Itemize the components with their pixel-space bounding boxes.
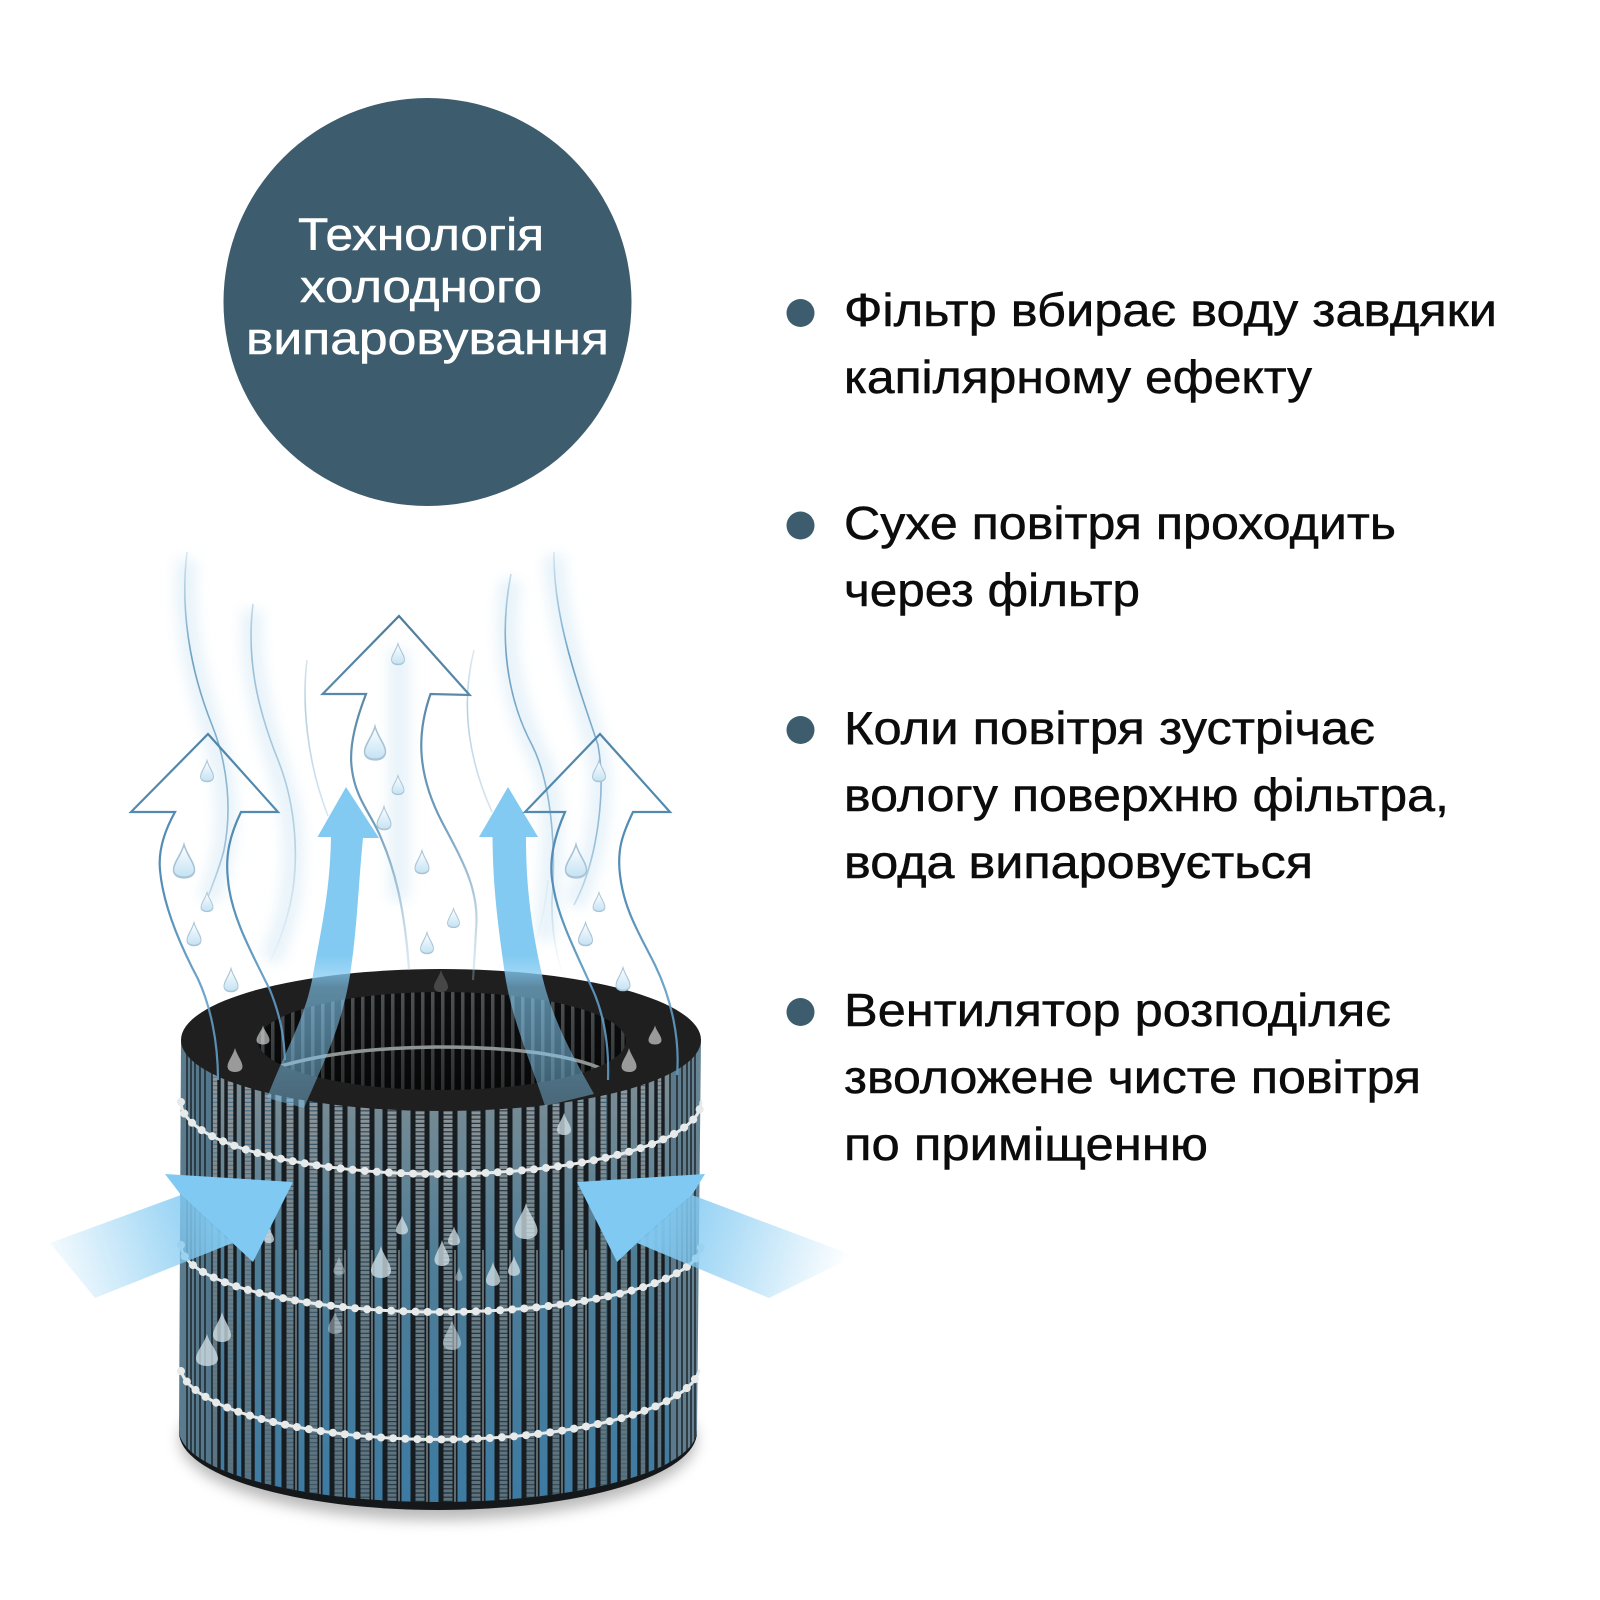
base edge — [179, 1420, 697, 1510]
bullet 1: капілярному ефекту — [844, 351, 1312, 403]
title circle: холодного — [300, 261, 542, 312]
bullet 4: зволожене чисте повітря — [844, 1051, 1421, 1103]
white bead rings — [181, 1102, 701, 1439]
ring bottom — [181, 1371, 699, 1439]
outline arrow: right — [525, 734, 678, 1080]
bullet 1: Фільтр вбирає воду завдяки — [844, 284, 1497, 336]
foam top rim — [181, 969, 701, 1111]
inner hole with pleats — [258, 992, 626, 1090]
bullet 3 — [786, 702, 1449, 888]
bullet 3: вологу поверхню фільтра, — [844, 769, 1449, 821]
grey pleats — [216, 1040, 659, 1508]
bullet list — [786, 284, 1497, 1170]
bullet 2 — [786, 497, 1396, 616]
ring top — [181, 1102, 701, 1174]
bullet 4 — [786, 984, 1421, 1170]
up arrow: right solid — [479, 787, 594, 1106]
outline arrow: centre — [323, 616, 477, 980]
bullet 4: по приміщенню — [844, 1118, 1208, 1170]
title circle: Технологія — [298, 209, 544, 260]
pleated body — [170, 1030, 710, 1520]
illustration: thin wavy vapour lines — [185, 552, 601, 1000]
filter cylinder — [170, 969, 710, 1520]
bullet 3: Коли повітря зустрічає — [844, 702, 1375, 754]
ground shadow — [180, 1360, 696, 1520]
bullet 3: вода випаровується — [844, 836, 1313, 888]
up arrow: left solid — [267, 787, 379, 1108]
bullet 2: через фільтр — [844, 564, 1140, 616]
bullet 2: Сухе повітря проходить — [844, 497, 1396, 549]
title circle: випаровування — [246, 313, 609, 364]
dark grooves — [187, 1040, 695, 1508]
droplets on filter — [196, 1113, 571, 1366]
ring middle — [181, 1245, 701, 1312]
droplets in air — [174, 644, 630, 992]
side arrow: left inflow — [50, 1174, 293, 1298]
droplets on rim — [228, 970, 662, 1072]
thin light streaks — [296, 1250, 586, 1505]
title circle — [224, 98, 632, 506]
bullet 1 — [786, 284, 1497, 403]
blue pleats — [223, 1040, 666, 1508]
side arrow: right inflow — [577, 1174, 855, 1298]
illustration: vapour glow — [186, 555, 600, 960]
bullet 4: Вентилятор розподіляє — [844, 984, 1391, 1036]
outline arrow: left — [131, 734, 285, 1080]
